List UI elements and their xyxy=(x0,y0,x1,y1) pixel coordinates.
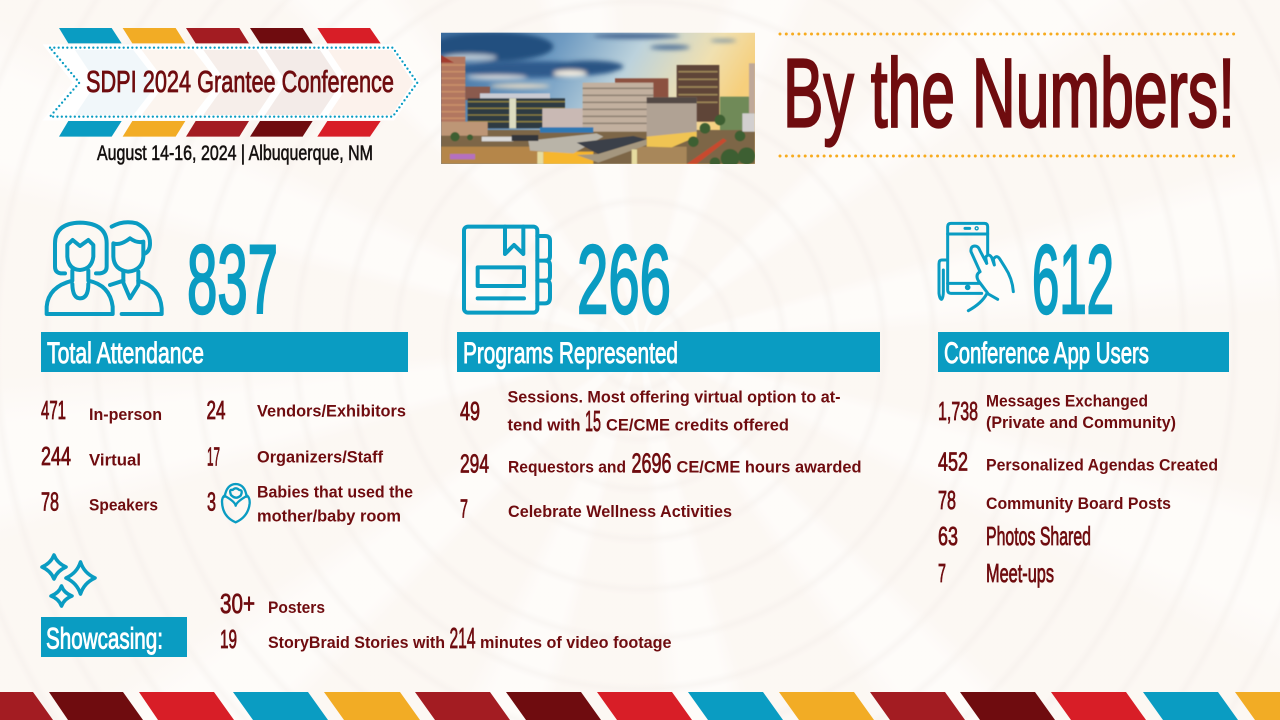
big number: 612: 612 xyxy=(1032,225,1114,334)
heading bar: Showcasing: Showcasing: xyxy=(46,622,163,656)
photo: Albuquerque skyline at dusk xyxy=(433,32,755,168)
bottom ribbon stripe xyxy=(0,692,1280,720)
stat: personalized agendas: 452 xyxy=(938,447,968,477)
panel: showcasing xyxy=(41,555,672,657)
stat: community board posts: Community Board Posts xyxy=(986,495,1171,513)
stat: virtual: Virtual xyxy=(89,452,141,470)
stat: sessions: tend with xyxy=(508,417,580,435)
stat: virtual: 244 xyxy=(41,441,71,471)
stat: organizers: 17 xyxy=(207,442,220,472)
icon: notebook with bookmark xyxy=(464,227,550,313)
heading bar: Total Attendance: Total Attendance xyxy=(47,337,204,370)
stat: in-person xyxy=(41,395,162,425)
stat: meet-ups: Meet-ups xyxy=(986,558,1054,588)
stat: posters: Posters xyxy=(268,599,325,617)
big number: 837: 837 xyxy=(187,225,278,334)
stat: requestors: CE/CME hours awarded xyxy=(676,459,862,477)
stat: messages: (Private and Community) xyxy=(986,414,1176,432)
icon: baby in tulip xyxy=(222,484,250,522)
stat: babies xyxy=(207,484,413,526)
stat: messages xyxy=(938,393,1176,432)
stat: in-person: 471 xyxy=(41,395,66,425)
stat: community board posts xyxy=(938,485,1171,515)
heading bar: Programs Represented: Programs Represented xyxy=(463,337,678,370)
stat: sessions: 49 xyxy=(460,396,480,426)
stat: sessions xyxy=(460,389,840,438)
heading bar: Programs Represented xyxy=(457,332,880,372)
stat: StoryBraid stories xyxy=(220,623,672,655)
stat: requestors: 294 xyxy=(460,449,489,479)
stat: StoryBraid stories: minutes of video footage xyxy=(480,634,672,652)
stat: meet-ups: 7 xyxy=(938,558,946,588)
icon: two people xyxy=(47,222,162,314)
stat: vendors xyxy=(206,395,406,425)
stat: photos shared: Photos Shared xyxy=(986,521,1091,551)
stat: messages: Messages Exchanged xyxy=(986,393,1148,411)
heading bar: Total Attendance xyxy=(41,332,408,372)
stat: StoryBraid stories: StoryBraid Stories with xyxy=(268,634,445,652)
stat: organizers xyxy=(207,442,383,472)
stat: StoryBraid stories: 214 xyxy=(450,623,476,655)
panel: conference app users xyxy=(938,223,1229,588)
stat: community board posts: 78 xyxy=(938,485,956,515)
stat: speakers xyxy=(41,486,158,516)
icon: sparkles xyxy=(42,555,95,606)
stat: meet-ups xyxy=(938,558,1054,588)
big number: 266: 266 xyxy=(577,225,671,334)
stat: babies: mother/baby room xyxy=(257,508,401,526)
stat: requestors: 2696 xyxy=(632,448,672,479)
conference name: SDPI 2024 Grantee Conference xyxy=(86,64,394,99)
stat: sessions: 15 xyxy=(585,406,601,438)
stat: wellness activities: Celebrate Wellness Activities xyxy=(508,503,732,521)
stat: personalized agendas xyxy=(938,447,1218,477)
stat: StoryBraid stories: 19 xyxy=(220,624,237,654)
stat: messages: 1,738 xyxy=(938,396,978,426)
stat: organizers: Organizers/Staff xyxy=(257,449,383,467)
stat: requestors xyxy=(460,448,862,479)
stat: wellness activities: 7 xyxy=(460,494,468,524)
heading bar: Showcasing xyxy=(41,617,187,657)
date and location: August 14-16, 2024 | Albuquerque, NM xyxy=(97,141,373,165)
stat: photos shared xyxy=(938,521,1091,551)
heading bar: Conference App Users: Conference App Users xyxy=(944,337,1149,370)
ribbon stripes: bottom row xyxy=(59,121,381,137)
stat: virtual xyxy=(41,441,141,471)
stat: speakers: Speakers xyxy=(89,496,158,514)
panel: total attendance xyxy=(41,222,413,526)
stat: sessions: CE/CME credits offered xyxy=(606,417,789,435)
stat: babies: 3 xyxy=(207,486,216,516)
stat: babies: Babies that used the xyxy=(257,484,413,502)
stat: personalized agendas: Personalized Agendas Created xyxy=(986,457,1218,475)
stat: posters: 30+ xyxy=(220,588,255,619)
stat: sessions: Sessions. Most offering virtual option to at- xyxy=(508,389,840,407)
panel: programs represented xyxy=(457,225,880,524)
stat: wellness activities xyxy=(460,494,732,524)
stat: requestors: Requestors and xyxy=(508,459,626,477)
ribbon stripes: top row xyxy=(59,28,381,43)
stat: speakers: 78 xyxy=(41,486,59,516)
stat: posters xyxy=(220,588,325,619)
stat: photos shared: 63 xyxy=(938,521,958,551)
stat: in-person: In-person xyxy=(89,406,162,424)
stat: vendors: Vendors/Exhibitors xyxy=(257,403,406,421)
stat: vendors: 24 xyxy=(206,395,226,425)
icon: hand tapping phone xyxy=(939,223,1013,311)
conference logo banner xyxy=(43,28,421,165)
arrow chevrons with dotted outline xyxy=(43,44,421,120)
